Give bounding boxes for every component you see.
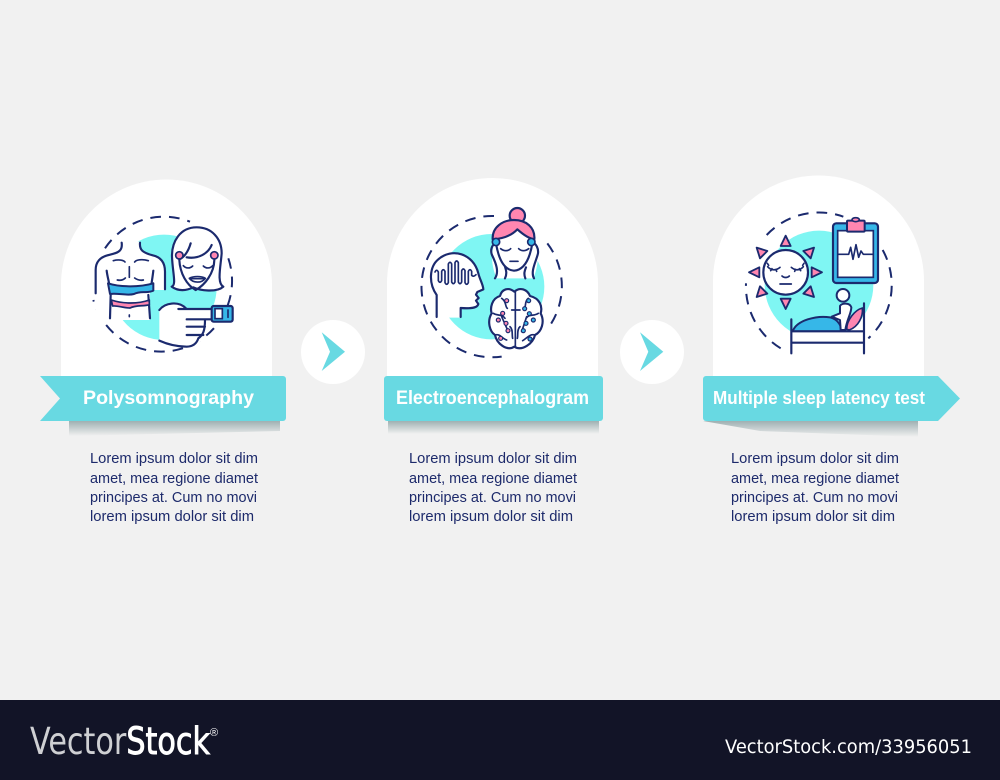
ribbon shadow 1 <box>69 421 280 436</box>
description 3: amet, mea regione diamet <box>731 471 899 487</box>
description 1 <box>90 451 258 525</box>
panel: multiple sleep latency test <box>703 176 960 525</box>
description 1: lorem ipsum dolor sit dim <box>90 509 254 525</box>
description 2: lorem ipsum dolor sit dim <box>409 509 573 525</box>
icon: polysomnography <box>93 217 233 352</box>
title 3: Multiple sleep latency test <box>713 387 925 408</box>
description 2: Lorem ipsum dolor sit dim <box>409 451 577 467</box>
arch card 2 <box>387 178 598 395</box>
description 1: Lorem ipsum dolor sit dim <box>90 451 258 467</box>
arrow 1 <box>301 320 365 384</box>
ribbon shadow 3 <box>703 421 918 437</box>
arch card 1 <box>61 180 272 395</box>
title 1: Polysomnography <box>83 388 254 409</box>
ribbon 3 <box>703 376 960 421</box>
description 2 <box>409 451 577 525</box>
panel: electroencephalogram <box>384 178 603 525</box>
description 2: amet, mea regione diamet <box>409 471 577 487</box>
description 3: principes at. Cum no movi <box>731 490 898 506</box>
description 3: lorem ipsum dolor sit dim <box>731 509 895 525</box>
icon: electroencephalogram <box>421 208 562 357</box>
ribbon 1 <box>40 376 286 421</box>
description 1: principes at. Cum no movi <box>90 490 257 506</box>
panel: polysomnography <box>40 180 286 525</box>
ribbon 2 <box>384 376 603 421</box>
ribbon shadow 2 <box>388 421 599 434</box>
description 3 <box>731 451 899 525</box>
footer bar <box>0 700 1000 780</box>
arrow 2 <box>620 320 684 384</box>
registered mark: ® <box>210 727 218 739</box>
description 1: amet, mea regione diamet <box>90 471 258 487</box>
description 3: Lorem ipsum dolor sit dim <box>731 451 899 467</box>
icon: sleep latency test <box>746 212 892 353</box>
description 2: principes at. Cum no movi <box>409 490 576 506</box>
arch card 3 <box>713 176 924 395</box>
footer url: VectorStock.com/33956051 <box>725 736 972 758</box>
footer logo: VectorStock <box>30 720 210 763</box>
title 2: Electroencephalogram <box>396 388 589 409</box>
